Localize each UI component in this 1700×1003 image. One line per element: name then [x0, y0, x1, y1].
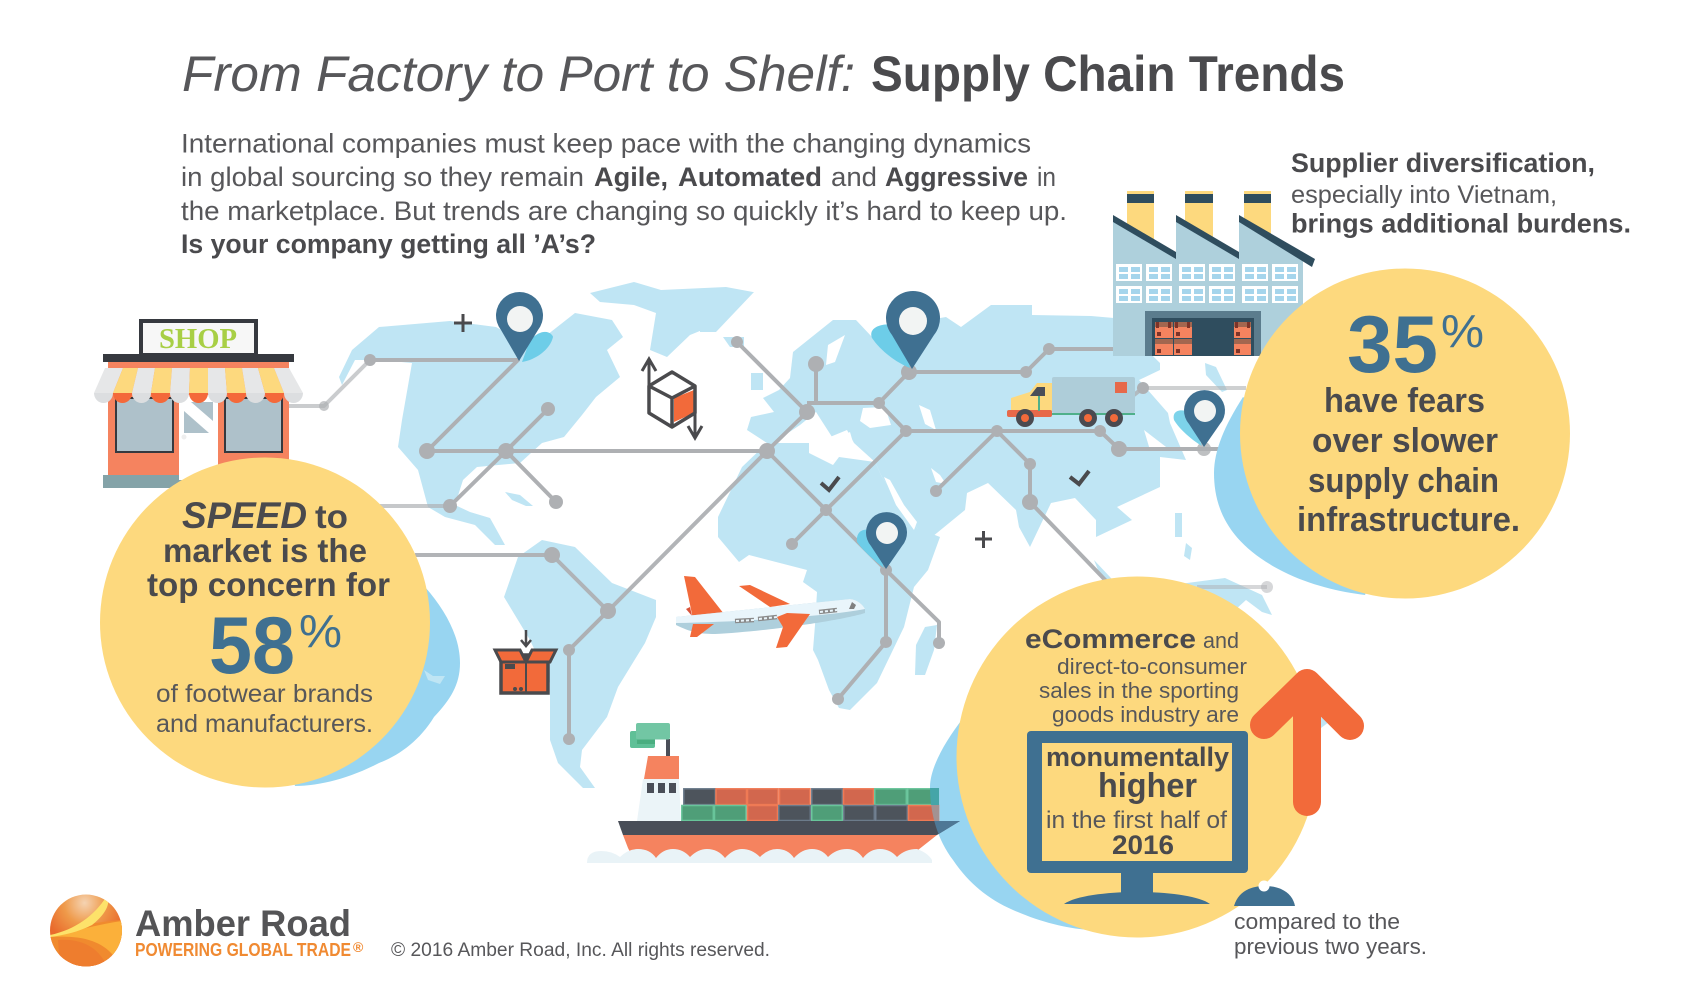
factory crates	[1155, 322, 1251, 355]
icon: check mark asia	[1070, 471, 1089, 484]
intro text block: in global sourcing so they remain	[181, 162, 584, 192]
intro text block: Agile,	[594, 162, 668, 192]
icon: storefront: SHOP	[159, 324, 237, 355]
world map	[339, 282, 1329, 788]
copyright: © 2016 Amber Road, Inc. All rights reserved.	[391, 940, 770, 961]
35 percent statistic	[1347, 300, 1484, 390]
infrastructure text: infrastructure.	[1297, 501, 1520, 539]
ship bridge	[637, 779, 681, 821]
icon: location pin europe	[871, 291, 940, 369]
icon: rotating box	[642, 359, 702, 438]
australia	[1172, 578, 1272, 615]
monitor text: 2016	[1112, 830, 1174, 860]
ship flag	[630, 731, 655, 748]
south america	[504, 540, 656, 788]
internal seas	[810, 335, 1170, 530]
awning	[94, 368, 303, 403]
icon: factory	[1113, 191, 1315, 356]
icon: plus sign west	[454, 314, 472, 332]
infrastructure text: supply chain	[1308, 462, 1499, 500]
icon: container ship	[587, 723, 960, 863]
icon: check mark africa	[821, 477, 839, 490]
icon: small pin dome	[1234, 880, 1295, 906]
speed text: top concern for	[147, 566, 390, 603]
panel: supplier diversification text	[1291, 148, 1631, 238]
icon: up arrow	[1264, 683, 1350, 802]
speed text: market is the	[163, 532, 367, 569]
speed text: to	[315, 498, 348, 535]
compared text: previous two years.	[1234, 934, 1427, 959]
icon: location pin north america	[496, 292, 553, 362]
monitor text: higher	[1098, 767, 1197, 805]
icon: storefront	[94, 321, 303, 488]
ecommerce text: direct-to-consumer	[1057, 654, 1247, 679]
icon: airplane	[676, 576, 865, 648]
ecommerce text: goods industry are	[1052, 702, 1239, 727]
containers	[682, 789, 938, 820]
58 percent statistic: 58	[209, 601, 295, 691]
icon: location pin east africa	[857, 512, 907, 569]
footwear text	[156, 680, 373, 738]
logo: amber road wordmark: POWERING GLOBAL TRADE	[135, 940, 351, 960]
58 percent statistic: %	[299, 605, 342, 657]
panel: speed to market	[100, 458, 460, 788]
icon: computer monitor	[1027, 731, 1248, 904]
intro text block: Is your company getting all ’A’s?	[181, 229, 596, 259]
speed text: SPEED	[182, 495, 307, 536]
monitor text	[1046, 742, 1229, 860]
ship overlap with blue	[930, 788, 960, 834]
eurasia	[747, 305, 1186, 547]
icon: plus sign east	[975, 531, 992, 548]
compared text: compared to the	[1234, 909, 1400, 934]
intro text block: the marketplace. But trends are changing so quickly it’s hard to keep up.	[181, 196, 1067, 226]
africa	[718, 443, 940, 710]
footwear text: and manufacturers.	[156, 710, 373, 738]
infrastructure text	[1297, 382, 1520, 539]
infrastructure text: have fears	[1324, 382, 1485, 420]
greenland	[590, 282, 753, 357]
waves	[587, 849, 932, 863]
icon: location pin east asia	[1174, 390, 1225, 447]
japan	[1205, 363, 1227, 392]
logo: amber road wordmark: ®	[353, 939, 364, 955]
icon: delivery truck	[1007, 377, 1135, 427]
panel: ecommerce	[956, 576, 1318, 938]
intro text block	[181, 128, 1067, 259]
indonesia islands	[1175, 513, 1182, 537]
caribbean	[505, 492, 533, 506]
compared text	[1234, 909, 1427, 959]
route nodes	[319, 336, 1273, 745]
hull	[623, 835, 937, 860]
intro text block: Aggressive	[885, 162, 1028, 192]
north america	[339, 313, 623, 545]
ecommerce text: and	[1203, 628, 1239, 653]
title	[182, 46, 1345, 102]
speed text	[147, 495, 390, 603]
ecommerce text	[1025, 624, 1247, 727]
infrastructure text: over slower	[1312, 422, 1498, 460]
uk	[751, 373, 763, 390]
footwear text: of footwear brands	[156, 680, 373, 708]
route network lines	[289, 342, 1267, 739]
ecommerce text: eCommerce	[1025, 624, 1196, 654]
australia east edge	[1321, 717, 1329, 728]
panel: ecommerce blue shadow	[930, 717, 1140, 930]
logo: amber road wordmark: Amber Road	[135, 903, 351, 944]
58 percent statistic	[209, 601, 342, 691]
panel: 35 percent infrastructure	[1214, 268, 1570, 598]
monitor text: monumentally	[1046, 742, 1229, 772]
logo: amber road wordmark	[135, 903, 364, 960]
iceland	[723, 337, 744, 347]
monitor text: in the first half of	[1046, 807, 1227, 834]
35 percent statistic: %	[1441, 305, 1484, 357]
panel: supplier diversification text: especially into Vietnam,	[1291, 181, 1557, 209]
intro text block: Automated	[678, 162, 822, 192]
logo: amber road orb	[50, 894, 122, 968]
icon: open parcel box	[495, 630, 556, 693]
intro text block: in	[1037, 162, 1056, 192]
title: From Factory to Port to Shelf:	[182, 46, 855, 102]
35 percent statistic: 35	[1347, 300, 1438, 390]
panel: supplier diversification text: brings additional burdens.	[1291, 208, 1631, 238]
title: Supply Chain Trends	[871, 46, 1345, 102]
factory windows	[1116, 264, 1298, 303]
madagascar	[915, 625, 937, 675]
intro text block: International companies must keep pace with the changing dynamics	[181, 128, 1031, 158]
panel: supplier diversification text: Supplier diversification,	[1291, 148, 1595, 178]
intro text block: and	[831, 162, 877, 192]
greenland east arctic	[700, 292, 754, 332]
ecommerce text: sales in the sporting	[1039, 678, 1239, 703]
